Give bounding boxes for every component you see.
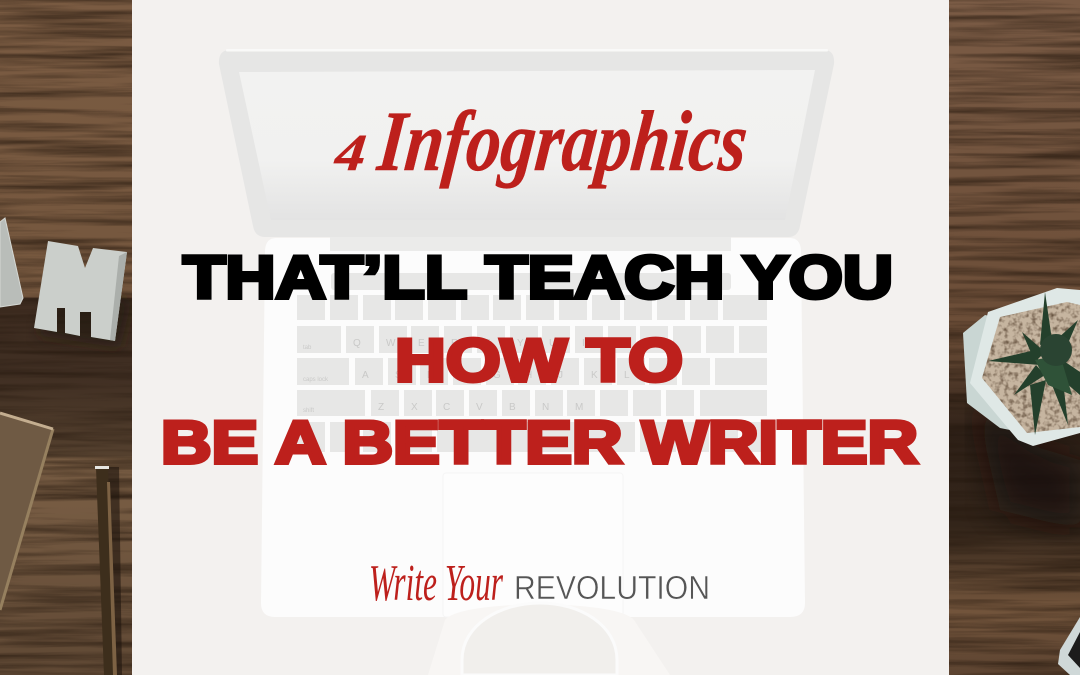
logo: Write Your Revolution <box>369 555 710 612</box>
heading line: BE A BETTER WRITER: BE A BETTER WRITER <box>161 409 918 476</box>
hands <box>428 604 670 675</box>
photo object: plant pot with succulent <box>963 288 1080 530</box>
laptop hinge <box>330 237 731 251</box>
photo object: pen <box>95 466 122 675</box>
laptop base <box>261 238 805 617</box>
key labels: tab <box>303 345 312 351</box>
heading line: THAT'LL TEACH YOU: THAT’LL TEACH YOU <box>183 244 893 311</box>
laptop illustration <box>219 49 834 617</box>
photo object: notebook <box>0 413 53 610</box>
panel: translucent white backdrop <box>132 0 949 675</box>
key labels: ASDFGHJKL <box>362 370 630 381</box>
photo object: concrete letter M <box>34 241 132 348</box>
lid highlight <box>226 49 828 52</box>
key labels: caps lock <box>303 377 329 383</box>
photo object: concrete letter A <box>0 218 23 307</box>
wood background: left <box>0 0 132 675</box>
key labels: QWERTYUIOP <box>353 338 654 349</box>
key labels: shift <box>303 408 314 414</box>
trackpad <box>443 473 623 617</box>
key labels <box>303 338 654 414</box>
wood background: right <box>949 0 1080 675</box>
keyboard <box>297 273 767 452</box>
photo object: phone corner <box>1058 617 1080 675</box>
cup <box>462 603 617 675</box>
laptop screen <box>239 70 815 220</box>
heading line: HOW TO: HOW TO <box>395 327 683 394</box>
laptop lid <box>219 50 834 237</box>
coffee cup held in hands <box>428 603 670 675</box>
script heading: 4 Infographics: Infographics <box>373 93 752 189</box>
key labels: ZXCVBNM <box>378 402 583 413</box>
logo: Write Your Revolution: Write Your <box>369 555 503 612</box>
succulent leaves <box>988 292 1080 435</box>
logo: Write Your Revolution: REVOLUTION <box>514 569 710 606</box>
script heading: 4 Infographics: 4 <box>332 125 369 182</box>
